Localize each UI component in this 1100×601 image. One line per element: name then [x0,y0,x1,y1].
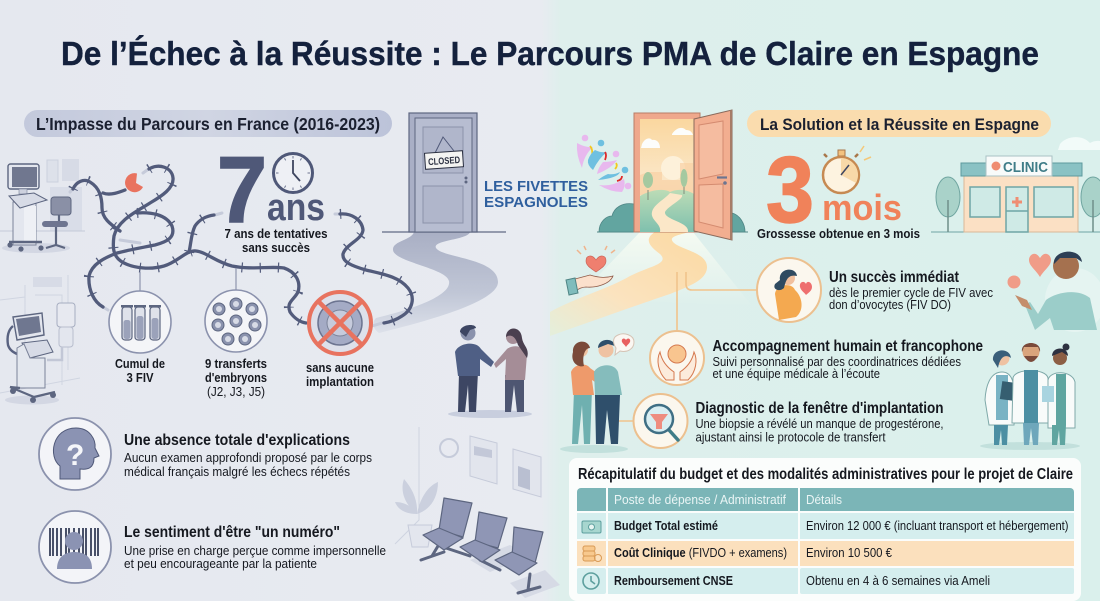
icon: no implantation [309,292,371,354]
title: De l’Échec à la Réussite : Le Parcours PMA de Claire en Espagne [61,35,1039,72]
icon: hand with heart [566,246,615,295]
table header: Détails [806,493,842,507]
item: succès immédiat: don d’ovocytes (FIV DO) [829,298,951,312]
row: budget total: Environ 12 000 € (incluant transport et hébergement) [806,519,1068,533]
illustration: doctors [980,343,1080,450]
icon: broken heart fragment [125,173,143,192]
item: absence d'explications: médical français malgré les échecs répétés [124,465,350,479]
labels under icons: sans aucune [306,361,374,375]
heading pill: Espagne: La Solution et la Réussite en Espagne [760,115,1039,134]
logo: Les Fivettes Espagnoles: LES FIVETTES [484,178,588,195]
item: accompagnement: Suivi personnalisé par des coordinatrices dédiées [712,355,961,369]
item: accompagnement [650,331,983,385]
icon: magnifier uterus [634,394,688,448]
text: 7 ans de tentatives: sans succès [242,241,310,255]
big number: 7 ans: ans [267,187,325,229]
connectors [618,272,757,421]
big number: 3 mois [766,137,902,242]
row: budget total: Budget Total estimé [614,519,718,533]
labels under icons: 3 FIV [126,371,154,385]
illustration: clinic [931,137,1100,232]
icon: pregnant woman [757,258,821,322]
row: remboursement [577,568,1074,594]
grey winding road [373,232,498,333]
item: succès immédiat [757,258,993,322]
icon: ultrasound machine lower left [0,275,80,404]
row: remboursement: Remboursement CNSE [614,574,733,588]
labels under icons [115,357,374,399]
icon: clock arrow [583,573,599,589]
item: sentiment numéro: et peu encourageante par la patiente [124,557,317,571]
big number: 3 mois: 3 [766,137,814,242]
panel: France [0,110,560,598]
icon: stopwatch [823,146,871,193]
icon: coins [583,546,602,562]
illustration: couple [560,334,634,453]
big number: 3 mois: mois [822,187,902,228]
labels under icons: (J2, J3, J5) [207,385,265,399]
panel: Espagne [550,110,1100,601]
item: accompagnement: Accompagnement humain et francophone [712,338,983,355]
row: remboursement: Obtenu en 4 à 6 semaines via Ameli [806,574,990,588]
row: coût clinique: Coût Clinique (FIVDO + examens) [614,546,787,560]
icon: test tubes [109,291,171,353]
door open [597,110,748,240]
heading pill: France: L’Impasse du Parcours en France (2016-2023) [36,114,380,134]
heading pill: Espagne [747,110,1051,137]
icon: caring hands [650,331,704,385]
item: sentiment numéro: Le sentiment d'être "un numéro" [124,524,340,541]
icon: embryos [205,290,267,352]
table header [577,488,1074,511]
logo: Les Fivettes Espagnoles [484,135,631,211]
labels under icons: Cumul de [115,357,165,371]
item: absence d'explications: Aucun examen approfondi proposé par le corps [124,451,372,465]
item: diagnostic: ajustant ainsi le protocole de transfert [696,430,886,444]
item: accompagnement: et une équipe médicale à l’écoute [712,367,880,381]
item: succès immédiat: Un succès immédiat [829,269,960,286]
item: diagnostic: Une biopsie a révélé un manque de progestérone, [696,417,944,431]
row: coût clinique: Environ 10 500 € [806,546,892,560]
item: diagnostic [634,394,944,448]
item: sentiment numéro: Une prise en charge perçue comme impersonnelle [124,544,386,558]
illustration: waiting room [395,427,560,598]
illustration: clinic: CLINIC [1003,160,1048,176]
item: absence d'explications: Une absence totale d'explications [124,432,350,449]
text: 7 ans de tentatives: 7 ans de tentatives [224,227,328,241]
row: budget total [577,513,1074,539]
icon: head question [39,418,111,490]
icon: barcode person [39,511,111,583]
row: coût clinique [577,541,1074,566]
item: diagnostic: Diagnostic de la fenêtre d'implantation [696,400,944,417]
logo mark [577,135,631,192]
logo: Les Fivettes Espagnoles: ESPAGNOLES [484,194,588,211]
text: grossesse: Grossesse obtenue en 3 mois [757,226,920,241]
light beam and golden road [550,232,752,336]
illustration: man with hearts [1008,252,1100,332]
heading pill: France [24,110,392,137]
labels under icons: implantation [306,375,374,389]
icon: banknote [582,521,601,533]
icon: head question: ? [66,439,84,472]
item: absence d'explications [39,418,372,490]
icon: clock [274,154,312,192]
icon: medical machine top left [0,159,85,253]
item: succès immédiat: dès le premier cycle de FIV avec [829,286,993,300]
labels under icons: d'embryons [205,371,267,385]
sign closed: CLOSED [428,155,461,168]
illustration: handshake [448,325,532,418]
door closed [382,113,506,232]
table header: Poste de dépense / Administratif [614,493,786,507]
labels under icons: 9 transferts [205,357,267,371]
item: sentiment numéro [39,511,386,583]
thorny vines [70,166,412,326]
text: 7 ans de tentatives [224,227,328,255]
panel: budget table [569,458,1081,601]
big number: 7 ans [217,137,325,242]
big number: 7 ans: 7 [217,137,267,242]
